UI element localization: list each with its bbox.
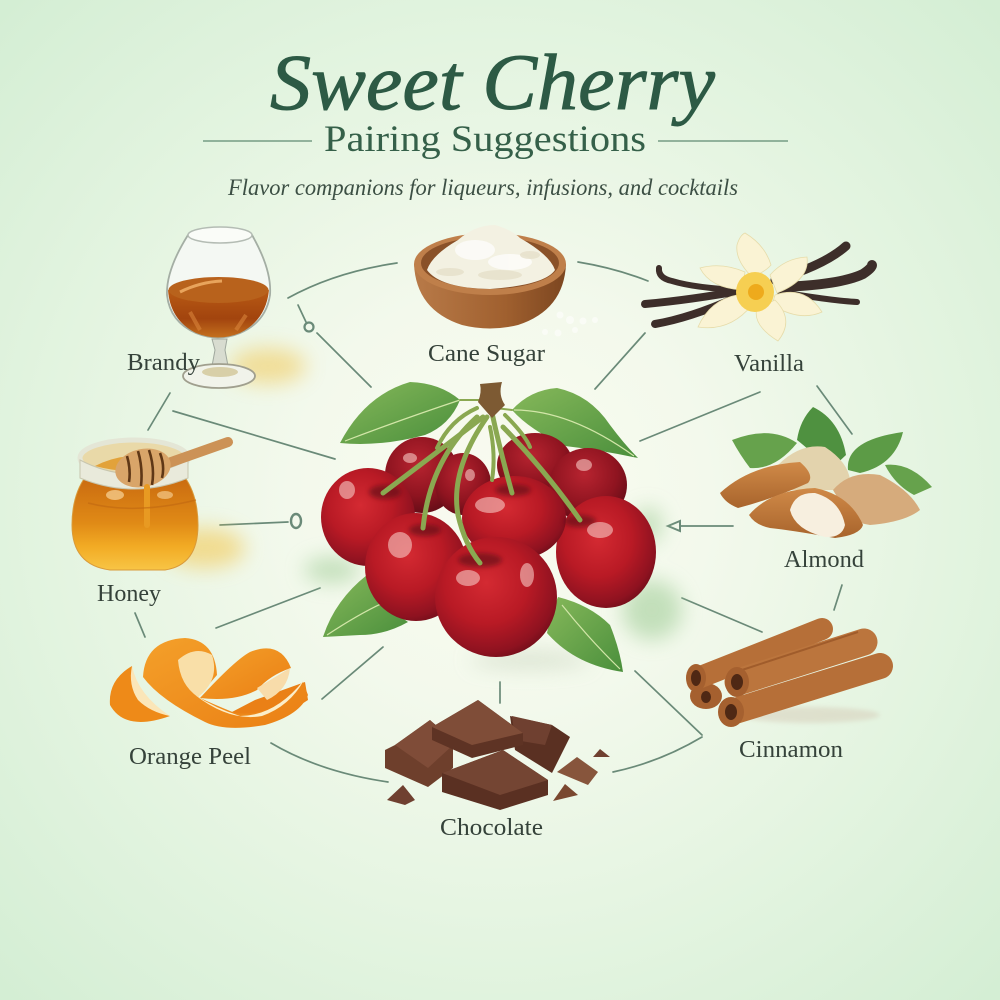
icon: brandy glass — [167, 227, 306, 388]
front cherries — [321, 468, 656, 657]
subtitle: pairing suggestions: Pairing Suggestions — [324, 119, 646, 160]
icon: orange peel — [110, 638, 308, 728]
stems — [383, 400, 580, 563]
label: cinnamon: Cinnamon — [739, 737, 843, 763]
highlights — [339, 453, 613, 587]
cherry dimples — [369, 484, 596, 567]
icon: almonds — [720, 407, 932, 538]
icon: vanilla — [645, 233, 872, 341]
label: almond: Almond — [784, 547, 864, 573]
icon: chocolate — [385, 700, 610, 810]
title: Sweet Cherry — [270, 40, 716, 127]
label: cane sugar: Cane Sugar — [428, 341, 545, 367]
connector lines — [135, 262, 852, 782]
label: orange peel: Orange Peel — [129, 744, 251, 770]
label: brandy: Brandy — [127, 350, 200, 376]
label: chocolate: Chocolate — [440, 815, 543, 841]
soft green wash — [304, 507, 682, 668]
central cherry cluster — [304, 382, 682, 672]
icon: honey jar — [72, 440, 245, 570]
back cherries — [385, 433, 627, 522]
leaves — [323, 382, 638, 672]
icon: cane sugar bowl — [414, 225, 598, 336]
label: honey: Honey — [97, 581, 161, 607]
icon: cinnamon — [686, 629, 880, 727]
tagline: Flavor companions for liqueurs, infusions, and cocktails — [227, 175, 738, 200]
leaf veins — [327, 400, 634, 669]
stem knot — [478, 382, 505, 418]
label: vanilla: Vanilla — [734, 351, 804, 377]
